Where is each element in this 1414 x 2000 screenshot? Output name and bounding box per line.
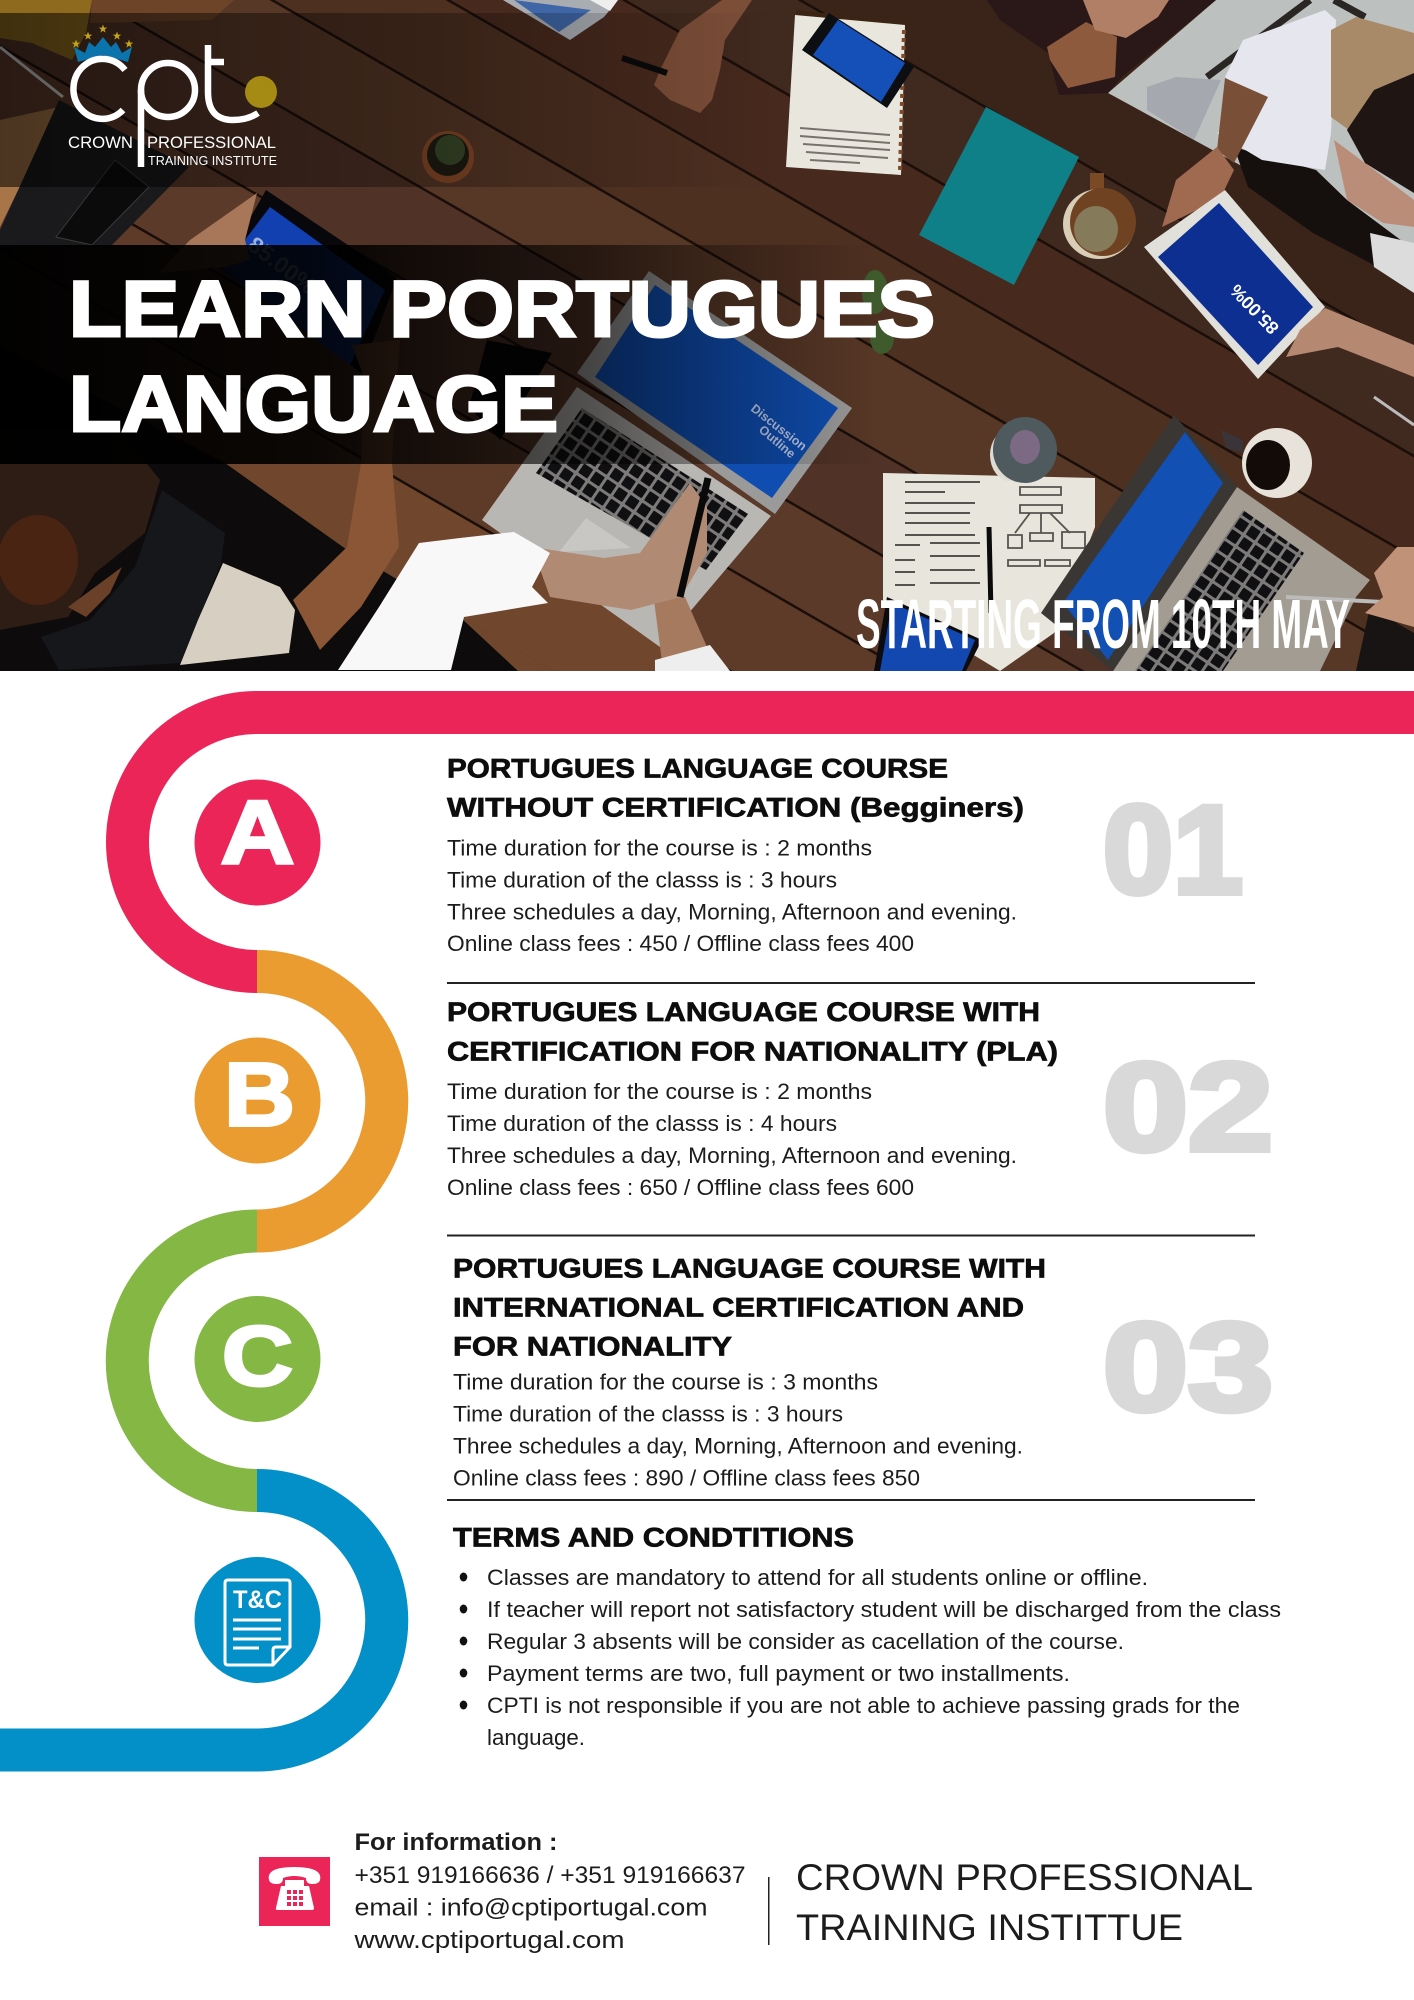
small phone under the notebook bbox=[874, 597, 982, 671]
title band bbox=[0, 245, 1414, 464]
institute name: CROWN PROFESSIONAL bbox=[796, 1857, 1253, 1898]
terms list bbox=[460, 1565, 1281, 1750]
marker B: B bbox=[224, 1046, 295, 1146]
contact details bbox=[353, 1829, 746, 1954]
icon: telephone bbox=[259, 1857, 330, 1926]
course 2 details: Online class fees : 650 / Offline class fees 600 bbox=[447, 1175, 914, 1200]
plant pot bbox=[422, 131, 474, 183]
icon: terms and conditions document bbox=[194, 1557, 320, 1683]
course 3 heading: FOR NATIONALITY bbox=[453, 1332, 732, 1362]
coffee on saucer bbox=[1221, 428, 1312, 498]
tablet, right: 85.00% bbox=[1226, 280, 1283, 338]
course 2 bbox=[447, 997, 1273, 1200]
snake path connector bbox=[0, 712, 1414, 1750]
course 1 details: Three schedules a day, Morning, Afternoon and evening. bbox=[447, 900, 1017, 924]
course 3 heading: PORTUGUES LANGUAGE COURSE WITH bbox=[453, 1254, 1046, 1284]
course 1 details: Time duration for the course is : 2 months bbox=[447, 836, 872, 860]
coffee cup bbox=[1063, 173, 1136, 259]
hand with pen, far right bbox=[1286, 397, 1414, 671]
terms heading: TERMS AND CONDTITIONS bbox=[453, 1522, 854, 1552]
icon: crown bbox=[72, 24, 133, 62]
main laptop bbox=[482, 271, 852, 647]
institute name bbox=[796, 1857, 1253, 1948]
man's sleeve, hand and pen bbox=[338, 478, 730, 671]
person: lower left bbox=[0, 464, 295, 670]
left tan surface, notebook and phone bbox=[0, 0, 234, 247]
course 1 heading: WITHOUT CERTIFICATION (Begginers) bbox=[447, 792, 1024, 822]
icon: terms and conditions document: T&C bbox=[233, 1586, 282, 1614]
number 03: 03 bbox=[1103, 1298, 1273, 1437]
notebook with phone bbox=[786, 10, 914, 175]
right laptop bbox=[1041, 415, 1370, 671]
hand on right tablet bbox=[1286, 308, 1414, 377]
course 2 heading: PORTUGUES LANGUAGE COURSE WITH bbox=[447, 997, 1040, 1027]
course 3 details: Time duration for the course is : 3 months bbox=[453, 1370, 878, 1394]
main laptop: Discussion bbox=[748, 401, 809, 453]
tablet, right bbox=[1144, 190, 1325, 379]
contact details: +351 919166636 / +351 919166637 bbox=[354, 1862, 746, 1889]
title: LEARN PORTUGUES bbox=[69, 264, 935, 353]
open notebook with sketches bbox=[883, 473, 1095, 671]
course 3 heading: INTERNATIONAL CERTIFICATION AND bbox=[453, 1292, 1024, 1322]
terms list: Regular 3 absents will be consider as cacellation of the course. bbox=[487, 1629, 1124, 1654]
floor, upper right bbox=[1108, 0, 1414, 260]
course 1 details bbox=[447, 836, 1017, 956]
terms list: If teacher will report not satisfactory student will be discharged from the class bbox=[487, 1597, 1281, 1622]
terms list: language. bbox=[487, 1725, 585, 1750]
person: upper right bbox=[1147, 10, 1414, 293]
black phone on table bbox=[469, 340, 552, 440]
floor, lower left bbox=[0, 464, 518, 671]
number 02: 02 bbox=[1103, 1038, 1273, 1177]
number 01: 01 bbox=[1103, 781, 1243, 920]
contact details: www.cptiportugal.com bbox=[353, 1927, 624, 1954]
terms list: Classes are mandatory to attend for all students online or offline. bbox=[487, 1565, 1148, 1590]
top laptop bbox=[503, 0, 618, 40]
course 2 details: Time duration for the course is : 2 months bbox=[447, 1079, 872, 1104]
course 2 details: Time duration of the classs is : 4 hours bbox=[447, 1111, 837, 1136]
marker B bbox=[194, 1038, 320, 1164]
course 2 heading bbox=[447, 997, 1058, 1066]
course 3 details: Time duration of the classs is : 3 hours bbox=[453, 1402, 843, 1426]
course 3 heading bbox=[453, 1254, 1046, 1362]
course 1 bbox=[447, 754, 1243, 956]
title: LANGUAGE bbox=[69, 359, 558, 448]
hand and arm of seated person, under title bbox=[293, 340, 400, 650]
logo wordmark: CROWN bbox=[68, 133, 133, 152]
logo wordmark: TRAINING INSTITUTE bbox=[148, 153, 277, 168]
succulent bbox=[990, 417, 1057, 483]
hand and pen, top centre bbox=[654, 0, 752, 113]
course 1 details: Time duration of the classs is : 3 hours bbox=[447, 868, 837, 892]
logo wordmark: PROFESSIONAL bbox=[147, 133, 276, 152]
course 3 bbox=[453, 1254, 1273, 1490]
plant under title bbox=[862, 270, 894, 354]
course 1 details: Online class fees : 450 / Offline class fees 400 bbox=[447, 931, 914, 956]
course 3 details bbox=[453, 1370, 1023, 1490]
course 1 heading bbox=[447, 754, 1024, 822]
terms and conditions bbox=[453, 1522, 1281, 1750]
course 2 details: Three schedules a day, Morning, Afternoon and evening. bbox=[447, 1143, 1017, 1168]
logo letters cpt bbox=[73, 45, 258, 167]
main laptop: Outline bbox=[756, 423, 798, 461]
title bbox=[69, 264, 935, 448]
contact details: email : info@cptiportugal.com bbox=[354, 1894, 708, 1922]
top logo band bbox=[0, 13, 1414, 187]
wooden table planks bbox=[0, 0, 1414, 671]
course 3 details: Online class fees : 890 / Offline class fees 850 bbox=[453, 1466, 920, 1490]
terms list: Payment terms are two, full payment or two installments. bbox=[487, 1661, 1070, 1686]
left tablet and hand: 85.00% bbox=[243, 231, 321, 299]
course 1 heading: PORTUGUES LANGUAGE COURSE bbox=[447, 754, 948, 784]
contact details: For information : bbox=[354, 1829, 558, 1856]
terms list: CPTI is not responsible if you are not able to achieve passing grads for the bbox=[487, 1693, 1240, 1718]
institute name: TRAINING INSTITTUE bbox=[796, 1907, 1183, 1948]
marker A: A bbox=[220, 784, 294, 884]
teal book bbox=[919, 107, 1079, 285]
course 3 details: Three schedules a day, Morning, Afternoon and evening. bbox=[453, 1434, 1023, 1458]
marker C: C bbox=[222, 1309, 293, 1403]
course 2 heading: CERTIFICATION FOR NATIONALITY (PLA) bbox=[447, 1036, 1058, 1066]
marker C bbox=[194, 1296, 320, 1422]
logo: CPT crown professional training institute bbox=[68, 24, 277, 168]
left tablet and hand bbox=[158, 190, 397, 373]
logo gold dot bbox=[245, 76, 277, 108]
logo wordmark bbox=[68, 133, 277, 168]
marker A bbox=[194, 780, 320, 906]
hero photo: team working around a wooden table bbox=[0, 0, 1414, 671]
course 2 details bbox=[447, 1079, 1017, 1200]
person: dark sleeve and fist, top bbox=[987, 0, 1216, 95]
